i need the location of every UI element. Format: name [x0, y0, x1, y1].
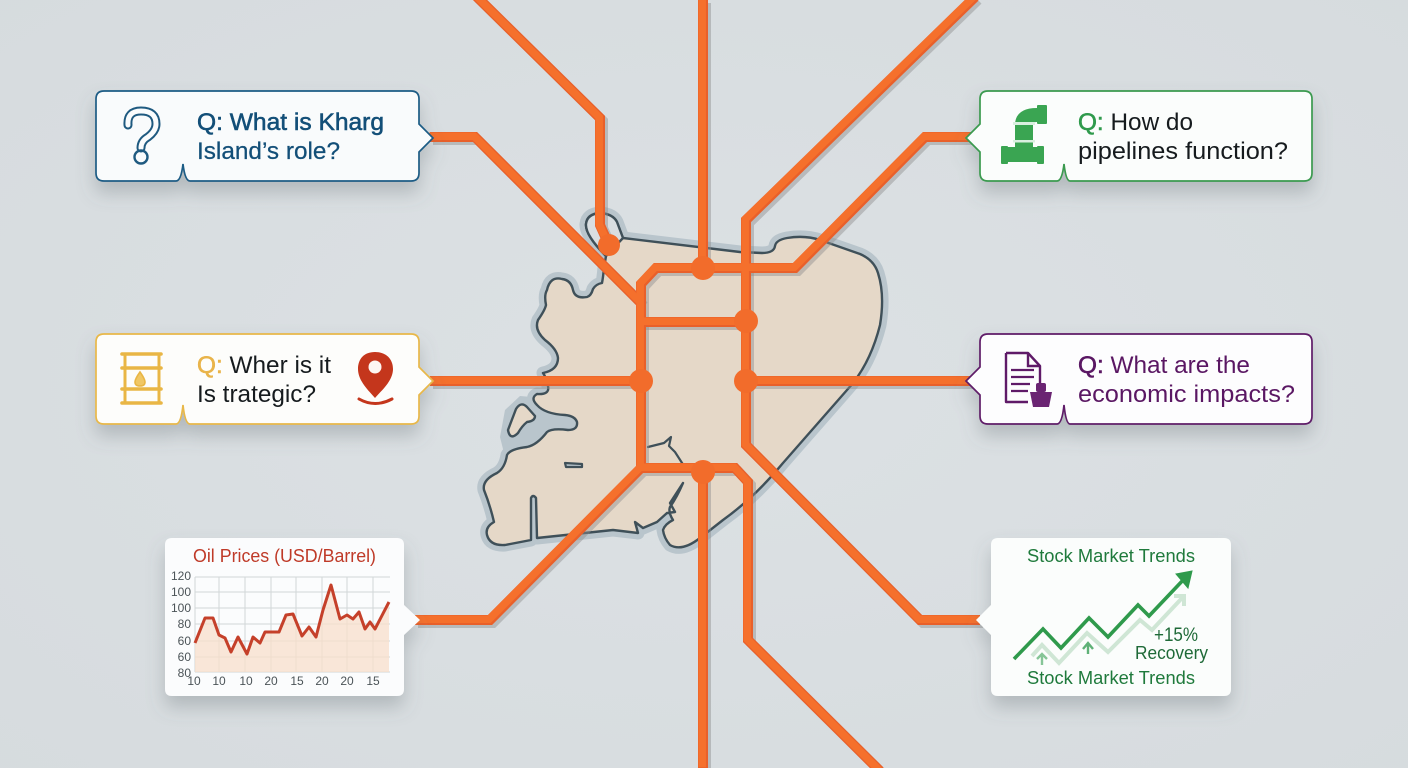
question text — [1078, 109, 1288, 165]
line chart: 100 — [171, 585, 191, 599]
line chart: 80 — [178, 617, 191, 631]
icon: question mark — [128, 111, 156, 164]
panel: economic impacts question — [966, 334, 1312, 424]
line chart — [171, 569, 390, 688]
icon: green pipe — [1001, 105, 1047, 164]
chart caption: Stock Market Trends — [1027, 668, 1195, 688]
line chart: 20 — [315, 674, 329, 688]
question text: economic impacts? — [1078, 381, 1295, 408]
line chart: 10 — [239, 674, 253, 688]
question text: pipelines function? — [1078, 138, 1288, 165]
chart title: Oil Prices (USD/Barrel) — [193, 546, 376, 566]
line chart: 60 — [178, 650, 191, 664]
line chart: 60 — [178, 634, 191, 648]
question text: Island’s role? — [197, 138, 340, 165]
chart title: Stock Market Trends — [1027, 546, 1195, 566]
question text: Q: What is Kharg — [197, 109, 384, 136]
panel: strategic location question — [96, 334, 433, 424]
icon: map pin — [358, 352, 393, 404]
line chart: 80 — [178, 666, 191, 680]
pipeline network — [414, 0, 983, 768]
panel: stock market trends — [976, 538, 1231, 696]
recovery label: +15% — [1154, 625, 1198, 646]
icon: oil barrel — [122, 354, 161, 403]
map: Kharg Island landmass — [484, 213, 882, 547]
panel: pipelines question — [966, 91, 1312, 181]
line chart: 100 — [171, 601, 191, 615]
line chart: 10 — [187, 674, 201, 688]
panel: oil prices chart — [165, 538, 420, 696]
line chart: 15 — [290, 674, 304, 688]
line chart: 20 — [340, 674, 354, 688]
question text — [197, 109, 384, 165]
line chart: 15 — [366, 674, 380, 688]
question text — [1078, 352, 1295, 408]
trend lines — [1014, 571, 1192, 665]
question text: Q: How do — [1078, 109, 1193, 136]
question text — [197, 352, 331, 408]
icon: document with basket — [1006, 353, 1052, 407]
recovery label: Recovery — [1135, 643, 1208, 663]
line chart: 20 — [264, 674, 278, 688]
question text: Q: Wher is it — [197, 352, 331, 379]
line chart: 120 — [171, 569, 191, 583]
line chart: 10 — [212, 674, 226, 688]
recovery label — [1135, 625, 1208, 663]
panel: Kharg Island role question — [96, 91, 433, 181]
question text: Q: What are the — [1078, 352, 1250, 379]
question text: Is trategic? — [197, 381, 316, 408]
